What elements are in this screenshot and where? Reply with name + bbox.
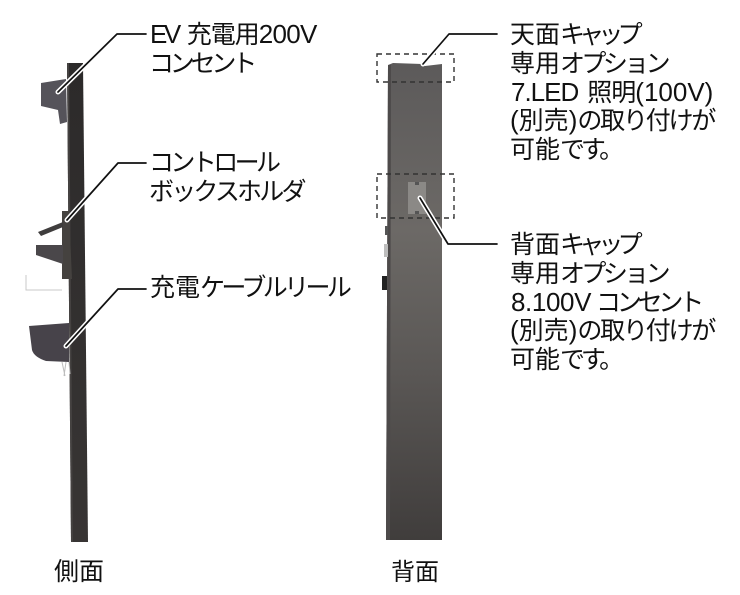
label: EV outlet <box>149 15 318 80</box>
side view: EV outlet box <box>41 79 67 124</box>
side view post <box>67 63 88 542</box>
label: top cap <box>510 15 716 166</box>
label: control box holder <box>149 143 306 208</box>
rear view post <box>386 63 442 540</box>
label: back cap: 可能です。 <box>510 340 620 376</box>
label: back cap: 専用オプション <box>510 254 667 290</box>
caption: side view: 側面 <box>54 552 104 588</box>
label: back cap: (別売)の取り付けが <box>510 311 714 347</box>
rear view: back cap plate <box>408 182 426 214</box>
label: EV outlet: コンセント <box>149 44 253 80</box>
label: top cap: 専用オプション <box>510 44 667 80</box>
label: top cap: 7.LED 照明(100V) <box>511 73 713 109</box>
label: top cap: (別売)の取り付けが <box>510 101 714 137</box>
label: back cap <box>510 225 716 376</box>
rear view: side fittings <box>382 226 388 290</box>
label: back cap: 8.100Vコンセント <box>511 283 700 319</box>
callout lines <box>58 34 497 346</box>
label: EV outlet: EV 充電用200V <box>150 15 317 51</box>
dashed box: back cap <box>377 174 454 218</box>
label: back cap: 背面キャップ <box>510 225 637 261</box>
dashed box: top cap <box>377 54 454 82</box>
label: control box holder: コントロール <box>149 143 277 179</box>
caption: rear view: 背面 <box>391 552 439 587</box>
label: top cap: 可能です。 <box>510 130 620 166</box>
label: cable reel: 充電ケーブルリール <box>150 268 348 304</box>
side view: control box holder <box>26 211 72 290</box>
label: control box holder: ボックスホルダ <box>149 172 304 208</box>
label: top cap: 天面キャップ <box>510 15 637 51</box>
side view: cable reel <box>29 323 70 376</box>
